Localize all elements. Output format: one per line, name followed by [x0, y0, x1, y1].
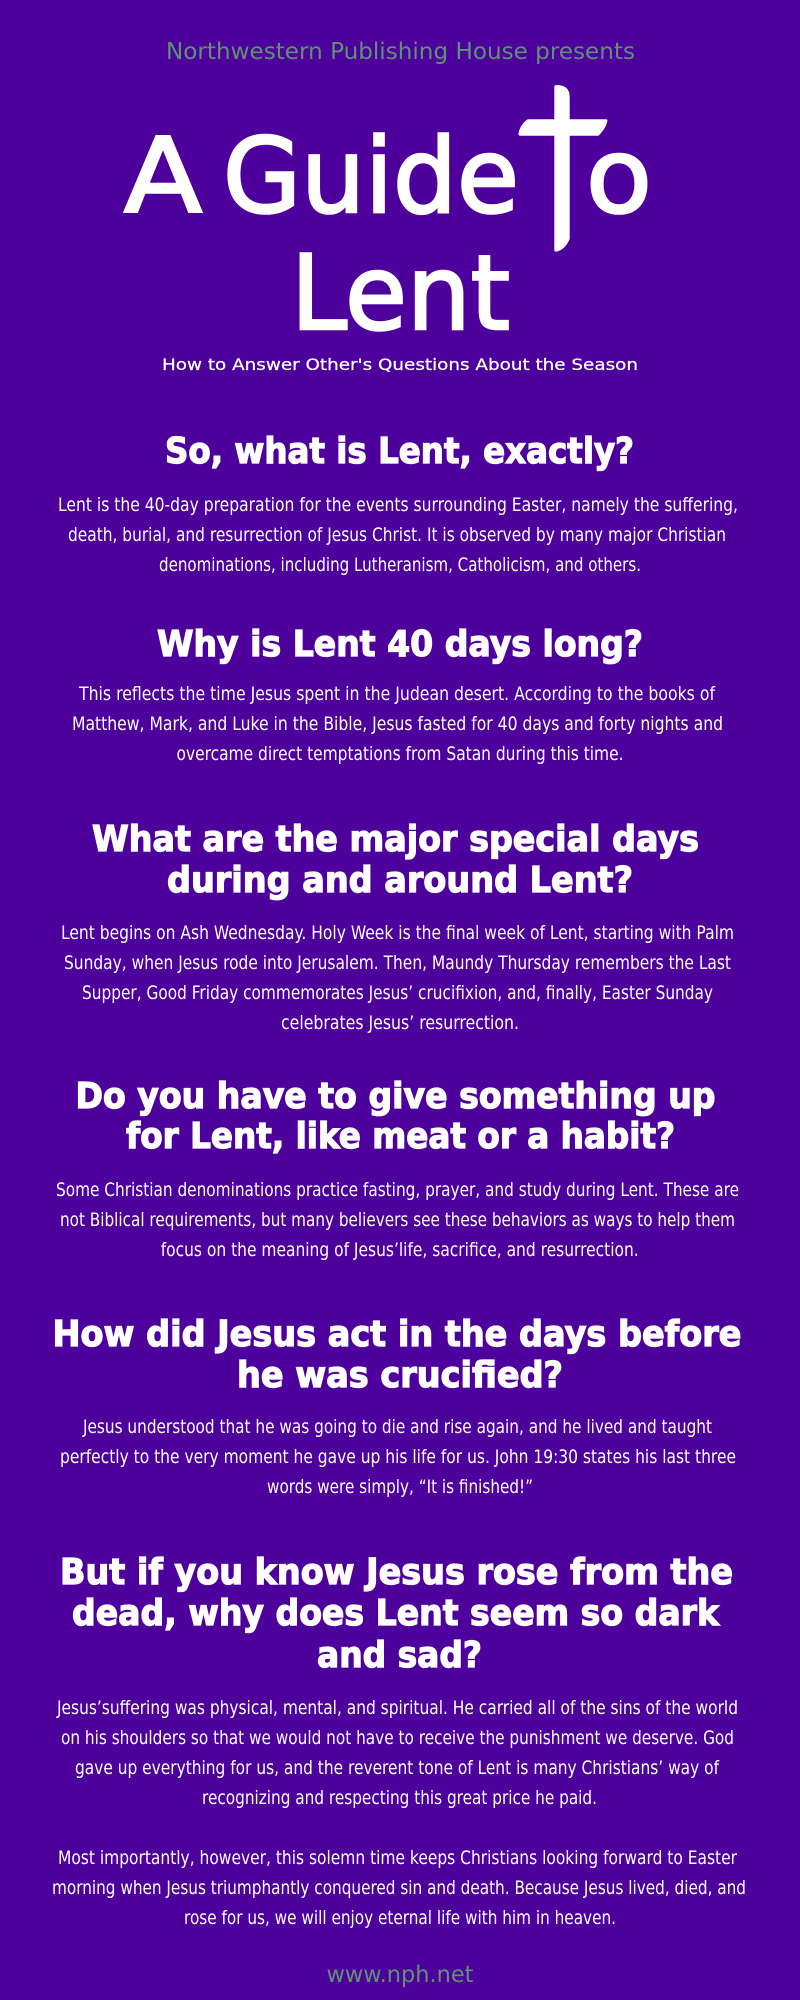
panel: what is Lent: [58, 431, 738, 576]
heading: How did Jesus act in the days before: [52, 1314, 742, 1355]
heading: and sad?: [317, 1635, 482, 1676]
title: Guide: [223, 117, 519, 237]
panel: giving something up: [56, 1076, 739, 1261]
panel: why 40 days: [72, 624, 723, 765]
body text: [72, 683, 723, 765]
closing paragraph: rose for us, we will enjoy eternal life with him in heaven.: [184, 1907, 616, 1929]
body text: recognizing and respecting this great price he paid.: [202, 1787, 597, 1809]
heading: [92, 819, 699, 901]
body text: focus on the meaning of Jesus’life, sacrifice, and resurrection.: [161, 1239, 639, 1261]
title: [124, 117, 652, 354]
heading: [52, 1314, 742, 1396]
body text: [58, 494, 738, 576]
heading: So, what is Lent, exactly?: [165, 431, 634, 472]
title: A: [124, 117, 202, 237]
panel: how Jesus acted: [52, 1314, 742, 1498]
body text: [61, 922, 734, 1034]
subtitle: How to Answer Other's Questions About the Season: [162, 355, 638, 374]
body text: celebrates Jesus’ resurrection.: [281, 1012, 519, 1034]
heading: [60, 1552, 733, 1676]
icon: cross forming the T of To: [518, 85, 607, 252]
heading: Why is Lent 40 days long?: [157, 624, 643, 665]
body text: denominations, including Lutheranism, Catholicism, and others.: [159, 554, 641, 576]
heading: for Lent, like meat or a habit?: [126, 1116, 675, 1157]
panel: major special days: [61, 819, 734, 1034]
closing paragraph: [52, 1847, 746, 1929]
body text: [60, 1416, 736, 1498]
heading: dead, why does Lent seem so dark: [72, 1593, 720, 1634]
heading: during and around Lent?: [167, 860, 633, 901]
presenter line: Northwestern Publishing House presents: [166, 39, 635, 65]
title: o: [586, 117, 652, 237]
panel: why so dark and sad: [52, 1552, 746, 1929]
heading: [76, 1076, 716, 1157]
website footer: www.nph.net: [326, 1962, 474, 1988]
title: Lent: [291, 234, 510, 354]
body text: words were simply, “It is finished!”: [267, 1476, 533, 1498]
heading: But if you know Jesus rose from the: [60, 1552, 733, 1593]
heading: Do you have to give something up: [76, 1076, 716, 1117]
body text: [56, 1179, 739, 1261]
body text: overcame direct temptations from Satan during this time.: [176, 743, 624, 765]
heading: What are the major special days: [92, 819, 699, 860]
body text: [56, 1697, 738, 1809]
heading: he was crucified?: [237, 1355, 563, 1396]
